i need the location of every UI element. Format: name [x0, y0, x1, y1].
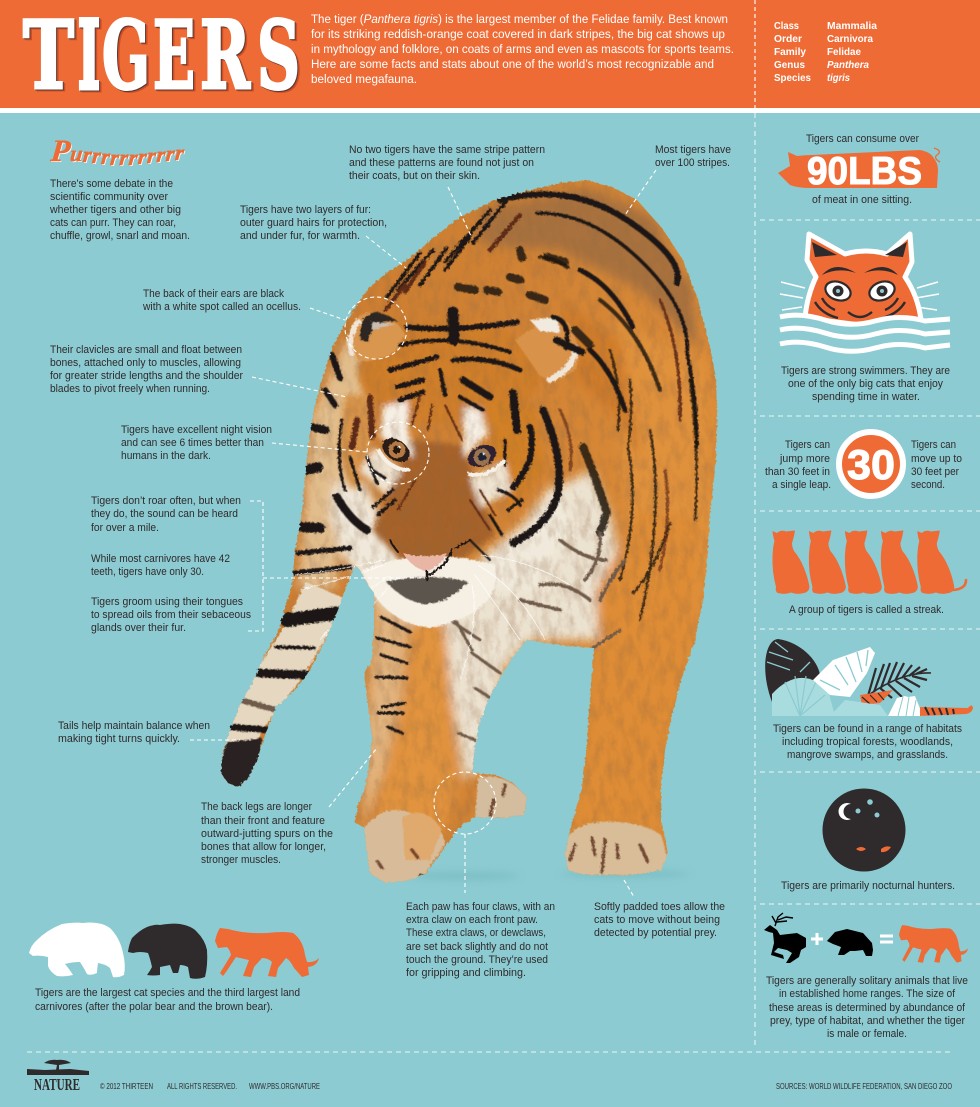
icon: five sitting tigers — [772, 530, 966, 594]
text: stripe pattern: No two tigers have the same stripe pattern — [349, 144, 545, 156]
text: stripe pattern: their coats, but on their skin. — [349, 170, 480, 182]
title: R — [201, 2, 252, 112]
neck and shoulder bands — [295, 355, 350, 573]
text: habitats: Tigers can be found in a range of habitats — [773, 723, 963, 735]
text: tail: Tails help maintain balance when — [58, 720, 210, 732]
text: toes: cats to move without being — [594, 914, 720, 926]
text: claws: for gripping and climbing. — [406, 967, 526, 979]
tail bands — [215, 590, 338, 790]
text: back legs: bones that allow for longer, — [201, 841, 326, 853]
title: R — [200, 1, 251, 111]
title: R — [202, 3, 253, 113]
taxonomy: tigris — [827, 72, 850, 84]
stat: 90LBS: 90LBS — [807, 150, 922, 193]
leg stripes — [376, 610, 620, 740]
logo: Nature — [27, 1060, 89, 1094]
title: E — [153, 1, 195, 111]
text: claws: Each paw has four claws, with an — [406, 901, 555, 913]
heading: Purrrrrrrrrr: urrrrrrrrrrr — [69, 140, 186, 170]
caption: Tigers are the largest cat species and the third largest land — [35, 987, 300, 999]
fur texture — [275, 180, 718, 862]
text: ears: The back of their ears are black — [143, 288, 285, 300]
text: habitats: including tropical forests, woodlands, — [782, 736, 953, 748]
text: swimmers: one of the only big cats that enjoy — [788, 378, 944, 390]
title — [23, 1, 302, 113]
panel: nocturnal — [781, 788, 955, 892]
text: back legs: The back legs are longer — [201, 801, 312, 813]
taxonomy — [774, 20, 877, 84]
ground shadows under paws — [410, 870, 690, 880]
taxonomy: Carnivora — [827, 33, 873, 45]
footer credits: ALL RIGHTS RESERVED. — [167, 1082, 237, 1091]
intro text: Here are some facts and stats about one of the world’s most recognizable and — [311, 57, 714, 71]
text: solitary: prey, type of habitat, and whether the tiger — [770, 1015, 965, 1027]
footer credits: © 2012 THIRTEEN — [100, 1082, 153, 1091]
intro text: in mythology and folklore, on coats of arms and even as mascots for sports teams. — [311, 42, 734, 56]
panel: swimmers — [780, 234, 950, 403]
text: tongues — [91, 596, 252, 634]
muzzle — [362, 540, 496, 628]
icon: night circle — [822, 788, 906, 872]
text: jump: a single leap. — [772, 479, 831, 491]
text: purring: cats can purr. They can roar, — [50, 217, 176, 229]
paws — [362, 776, 668, 885]
text: swimmers: spending time in water. — [812, 391, 920, 403]
taxonomy: Genus — [774, 59, 805, 71]
badge: 30 — [839, 432, 903, 496]
text: clavicles — [50, 344, 243, 395]
taxonomy: Order — [774, 33, 802, 45]
text: night vision: Tigers have excellent night vision — [121, 424, 272, 436]
text: claws: extra claw on each front paw. — [406, 914, 538, 926]
text: speed — [911, 439, 962, 491]
text: stripes count: over 100 stripes. — [655, 157, 730, 169]
text: speed: 30 feet per — [911, 466, 959, 478]
text: purring: whether tigers and other big — [49, 204, 181, 216]
panel: size comparison — [29, 923, 319, 1013]
icon: jungle leaves — [765, 639, 973, 716]
text: tail — [58, 720, 210, 745]
text: jump: than 30 feet in — [765, 466, 830, 478]
callout leader lines — [190, 170, 656, 897]
icon: equals — [880, 936, 893, 942]
taxonomy: Class — [774, 20, 799, 32]
text: fur layers: Tigers have two layers of fur: — [240, 204, 371, 216]
ear patches — [348, 312, 578, 380]
text: habitats: mangrove swamps, and grasslands. — [787, 749, 948, 761]
text: clavicles: for greater stride lengths and the shoulder — [50, 370, 243, 382]
callout circle: ear — [345, 297, 407, 359]
intro text: beloved megafauna. — [311, 72, 417, 86]
text: claws: touch the ground. They’re used — [406, 954, 548, 966]
footer credits: WWW.PBS.ORG/NATURE — [249, 1082, 320, 1091]
text: toes: Softly padded toes allow the — [594, 901, 725, 913]
text: consume: Tigers can consume over — [806, 133, 919, 145]
text: solitary — [766, 975, 968, 1040]
text: jump: Tigers can — [785, 439, 830, 451]
icon: plus — [811, 933, 823, 945]
icon: boar — [827, 929, 873, 956]
panel: 90 lbs of meat — [778, 133, 940, 206]
text: back legs — [201, 801, 333, 866]
head stripes — [337, 312, 559, 560]
title: T — [23, 1, 74, 111]
text: stripes count — [655, 144, 731, 169]
text: night vision: and can see 6 times better than — [121, 437, 264, 449]
callout circle: eye — [367, 422, 429, 484]
tiger photo illustration — [210, 170, 730, 890]
text: roar: they do, the sound can be heard — [91, 508, 238, 520]
text: stripe pattern: and these patterns are found not just on — [349, 157, 534, 169]
title: E — [154, 2, 196, 112]
text: fur layers: and under fur, for warmth. — [240, 230, 360, 242]
text: solitary: Tigers are generally solitary animals that live — [766, 975, 968, 987]
taxonomy: Species — [774, 72, 811, 84]
text: habitats — [773, 723, 963, 761]
text: nocturnal: Tigers are primarily nocturnal hunters. — [781, 880, 955, 892]
text: purring: scientific community over — [50, 191, 168, 203]
face patches — [338, 320, 545, 560]
text: stripes count: Most tigers have — [655, 144, 731, 156]
panel: 30 stat — [765, 432, 962, 496]
taxonomy: Family — [774, 46, 806, 58]
taxonomy: Felidae — [827, 46, 861, 58]
text: fur layers — [240, 204, 387, 242]
header banner — [0, 0, 980, 113]
intro text: The tiger (Panthera tigris) is the largest member of the Felidae family. Best known — [311, 12, 728, 26]
text: speed: Tigers can — [911, 439, 956, 451]
text: claws: are set back slightly and do not — [406, 941, 548, 953]
taxonomy: Mammalia — [827, 20, 877, 32]
title: I — [79, 2, 101, 112]
text: ears: with a white spot called an ocellus. — [142, 301, 301, 313]
text: meat: of meat in one sitting. — [812, 194, 912, 206]
text: clavicles: blades to pivot freely when running. — [50, 383, 210, 395]
text: streak: A group of tigers is called a streak. — [789, 604, 944, 616]
text: swimmers: Tigers are strong swimmers. They are — [781, 365, 950, 377]
title: S — [257, 1, 300, 111]
text: ears — [142, 288, 301, 313]
badge: 30: 30 — [847, 441, 895, 488]
text: teeth: teeth, tigers have only 30. — [91, 566, 204, 578]
title: G — [102, 1, 150, 111]
text: tail: making tight turns quickly. — [58, 733, 180, 745]
text: purring — [49, 178, 190, 242]
logo: Nature: NATURE — [34, 1075, 80, 1094]
heading: Purrrrrrrrrr: P — [48, 133, 73, 168]
title: T — [24, 2, 75, 112]
intro text — [311, 12, 734, 86]
text: jump — [765, 439, 831, 491]
fur colour patches — [298, 188, 712, 840]
heading: Purrrrrrrrrr — [48, 133, 187, 171]
caption — [35, 987, 300, 1013]
panel: solitary — [764, 913, 968, 1040]
text: purring: chuffle, growl, snarl and moan. — [50, 230, 190, 242]
panel: streak — [772, 530, 966, 616]
text: tongues: to spread oils from their sebaceous — [91, 609, 252, 621]
title: S — [260, 3, 302, 113]
icon: tiger swimming — [780, 234, 950, 351]
text: teeth: While most carnivores have 42 — [91, 553, 230, 565]
icon: deer — [764, 913, 806, 963]
title: E — [156, 3, 198, 113]
text: jump: jump more — [779, 453, 830, 465]
text: claws: These extra claws, or dewclaws, — [406, 927, 546, 939]
heading: Purrrrrrrrrr: P — [49, 134, 74, 169]
eyes — [378, 433, 505, 475]
taxonomy: Panthera — [827, 59, 869, 71]
title: G — [104, 3, 152, 113]
title: G — [103, 2, 151, 112]
text: solitary: is male or female. — [827, 1028, 907, 1040]
title: I — [78, 1, 100, 111]
whiskers — [295, 555, 570, 680]
text: speed: second. — [911, 479, 945, 491]
panel: habitats — [765, 639, 973, 761]
text: back legs: stronger muscles. — [201, 854, 281, 866]
text: swimmers — [781, 365, 950, 403]
callout circle: paw — [434, 772, 496, 834]
text: solitary: in established home ranges. The size of — [779, 988, 956, 1000]
text: roar: for over a mile. — [91, 522, 159, 534]
text: stripe pattern — [349, 144, 545, 182]
icon: brown bear — [128, 924, 207, 979]
text: toes: detected by potential prey. — [594, 927, 717, 939]
text: purring: There's some debate in the — [50, 178, 173, 190]
text: speed: move up to — [911, 453, 962, 465]
text: claws — [406, 901, 555, 979]
text: toes — [594, 901, 725, 939]
text: night vision: humans in the dark. — [121, 450, 211, 462]
title: S — [258, 2, 301, 112]
text: clavicles: Their clavicles are small and float between — [50, 344, 242, 356]
text: teeth — [91, 553, 230, 578]
text: fur layers: outer guard hairs for protection, — [240, 217, 387, 229]
text: solitary: these areas is determined by abundance of — [769, 1002, 966, 1014]
icon: polar bear — [29, 923, 125, 977]
text: roar: Tigers don’t roar often, but when — [91, 495, 241, 507]
text: night vision — [121, 424, 272, 462]
title: I — [80, 3, 102, 113]
icon: tiger prey result — [899, 925, 968, 963]
icon: tiger silhouette — [215, 928, 319, 977]
text: back legs: than their front and feature — [201, 815, 325, 827]
text: clavicles: bones, attached only to muscles, allowing — [50, 357, 241, 369]
body stripes — [385, 194, 697, 620]
intro text: for its striking reddish-orange coat covered in dark stripes, the big cat shows up — [311, 27, 725, 41]
text: tongues: glands over their fur. — [91, 622, 186, 634]
text: tongues: Tigers groom using their tongues — [91, 596, 244, 608]
caption: carnivores (after the polar bear and the brown bear). — [35, 1001, 273, 1013]
title: T — [26, 3, 76, 113]
footer credits — [100, 1082, 320, 1091]
heading: Purrrrrrrrrr: urrrrrrrrrrr — [70, 141, 187, 171]
icon: pig shape — [778, 148, 940, 188]
text: back legs: outward-jutting spurs on the — [201, 828, 333, 840]
text: roar — [91, 495, 241, 534]
